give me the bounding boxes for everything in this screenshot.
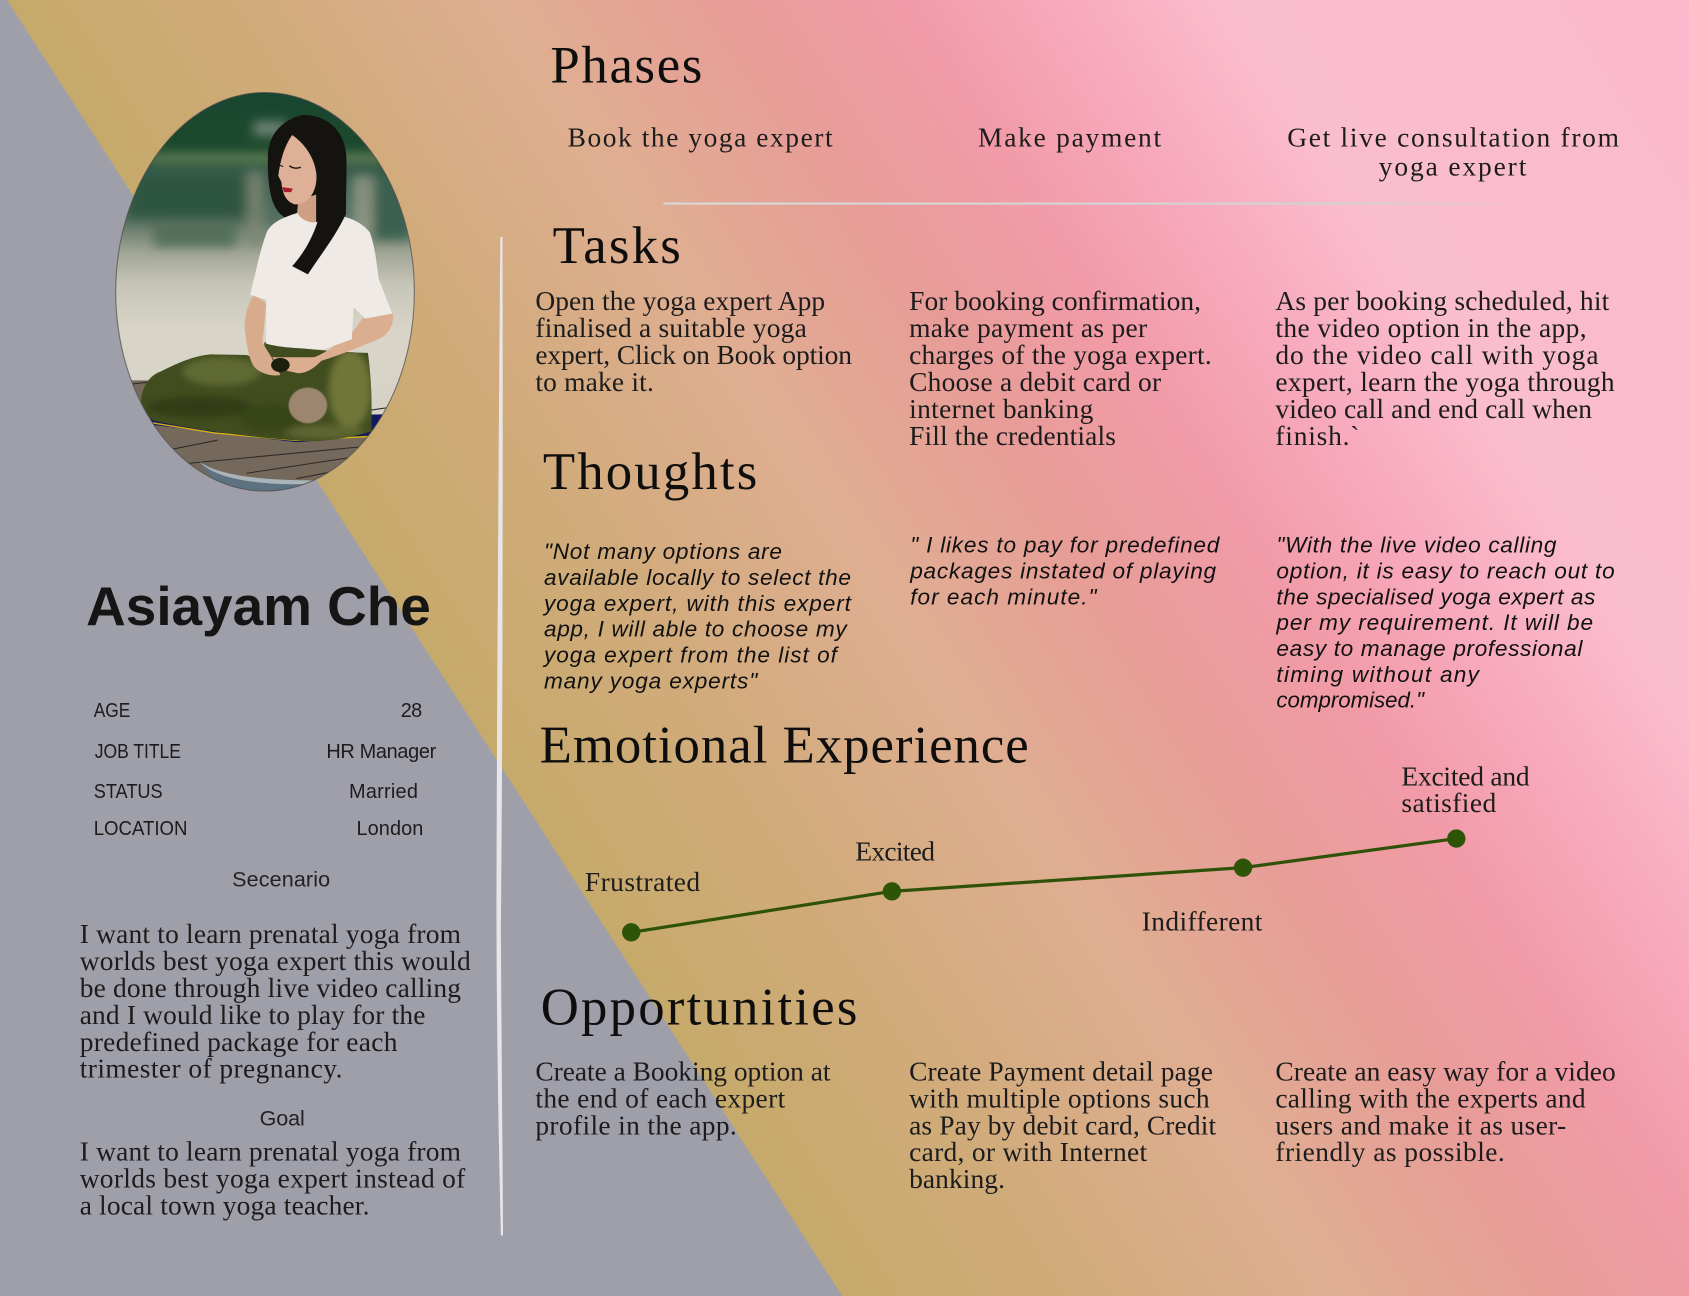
heading: tasks: Tasks [553,217,681,275]
opportunities column 3: users and make it as user- [1275,1110,1566,1140]
mat [150,414,384,442]
arms [245,295,280,376]
thoughts column 1: available locally to select the [544,565,851,590]
opportunities column 2 [909,1056,1216,1194]
hair back [268,115,346,229]
opportunities column 3: Create an easy way for a video [1275,1056,1616,1086]
photo border [116,93,414,491]
phases columns [568,122,1619,182]
persona details: AGE [94,700,130,722]
emotion line chart: Indifferent [1142,907,1263,937]
tasks column 3: the video option in the app, [1275,313,1587,343]
horizontal divider [664,203,1503,205]
tasks column 1: expert, Click on Book option [535,340,852,370]
emotion line chart: Frustrated [585,867,700,897]
opportunities column 2: as Pay by debit card, Credit [909,1110,1216,1140]
neck and face [296,195,316,225]
emotion line chart: Excited and [1401,761,1530,791]
tasks column 3: do the video call with yoga [1275,340,1599,370]
tasks column 1: finalised a suitable yoga [535,313,807,343]
persona details: 28 [401,700,422,722]
tasks column 3: finish.` [1275,421,1359,451]
persona details: JOB TITLE [95,741,181,763]
thoughts column 2 [909,533,1221,609]
scenario text: worlds best yoga expert this would [80,946,471,976]
tasks column 1 [535,286,852,397]
opportunities column 3: calling with the experts and [1275,1083,1586,1113]
thoughts column 2: for each minute." [910,584,1098,609]
phases columns: yoga expert [1379,152,1527,182]
scenario heading: Secenario [232,868,330,892]
goal heading: Goal [260,1107,305,1131]
thoughts column 3: easy to manage professional [1276,636,1583,661]
skirt [141,342,372,442]
grey diagonal panel [0,0,843,1296]
tasks column 2 [909,286,1212,451]
thoughts column 1 [542,539,853,693]
hair strand [292,157,346,274]
thoughts column 2: " I likes to pay for predefined [910,533,1221,558]
tasks column 2: Choose a debit card or [909,367,1161,397]
scenario text: I want to learn prenatal yoga from [80,919,461,949]
tasks column 2: For booking confirmation, [909,286,1201,316]
scenario text [80,919,471,1084]
thoughts column 3: the specialised yoga expert as [1276,584,1595,609]
opportunities column 1: the end of each expert [535,1083,786,1113]
opportunities column 1: Create a Booking option at [535,1056,831,1086]
vertical divider [496,237,503,1236]
persona name: Asiayam Che [86,575,431,637]
tasks column 3 [1275,286,1615,451]
heading: thoughts: Thoughts [543,443,757,501]
phases columns: Book the yoga expert [568,122,833,152]
persona details: Married [349,781,418,803]
portrait photo: woman meditating [114,91,416,493]
emotion line chart: satisfied [1401,788,1496,818]
goal text: a local town yoga teacher. [80,1191,369,1221]
thoughts column 1: yoga expert from the list of [542,642,840,667]
opportunities column 2: with multiple options such [909,1083,1210,1113]
tasks column 2: Fill the credentials [909,421,1116,451]
thoughts column 1: yoga expert, with this expert [542,591,853,616]
thoughts column 1: many yoga experts" [544,668,758,693]
thoughts column 1: app, I will able to choose my [544,617,848,642]
persona details: STATUS [94,781,163,803]
tasks column 2: charges of the yoga expert. [909,340,1212,370]
tasks column 1: to make it. [535,367,654,397]
heading: emotional experience: Emotional Experience [540,717,1029,775]
opportunities column 2: card, or with Internet [909,1137,1148,1167]
opportunities column 2: Create Payment detail page [909,1056,1213,1086]
tasks column 3: video call and end call when [1275,394,1592,424]
goal text [80,1137,466,1221]
phases columns: Get live consultation from [1287,122,1619,152]
thoughts column 3: per my requirement. It will be [1275,610,1593,635]
scenario text: be done through live video calling [80,973,461,1003]
persona details [94,700,437,840]
goal text: I want to learn prenatal yoga from [80,1137,461,1167]
persona details: HR Manager [326,741,437,763]
persona details: LOCATION [94,818,187,840]
shirt [250,213,392,349]
tasks column 3: expert, learn the yoga through [1275,367,1615,397]
thoughts column 2: packages instated of playing [909,558,1217,583]
dock [132,380,367,480]
tasks column 2: internet banking [909,394,1094,424]
thoughts column 3: compromised." [1276,688,1425,713]
thoughts column 3 [1275,533,1615,713]
scenario text: trimester of pregnancy. [80,1054,343,1084]
opportunities column 1: profile in the app. [535,1110,737,1140]
tasks column 2: make payment as per [909,313,1147,343]
emotion line chart [585,761,1530,941]
tasks column 3: As per booking scheduled, hit [1275,286,1610,316]
opportunities column 3: friendly as possible. [1275,1137,1505,1167]
thoughts column 3: option, it is easy to reach out to [1276,558,1615,583]
scenario text: and I would like to play for the [80,1000,425,1030]
thoughts column 3: "With the live video calling [1276,533,1557,558]
emotion line chart: Excited [855,837,935,867]
scenario text: predefined package for each [80,1027,398,1057]
opportunities column 2: banking. [909,1164,1005,1194]
tasks column 1: Open the yoga expert App [535,286,825,316]
thoughts column 1: "Not many options are [544,539,782,564]
opportunities column 3 [1275,1056,1616,1167]
phases columns: Make payment [978,122,1162,152]
heading: phases: Phases [550,36,702,94]
heading: opportunities: Opportunities [541,978,857,1036]
persona details: London [357,818,423,840]
opportunities column 1 [535,1056,831,1140]
thoughts column 3: timing without any [1276,662,1481,687]
goal text: worlds best yoga expert instead of [80,1164,466,1194]
bowl [200,462,302,491]
